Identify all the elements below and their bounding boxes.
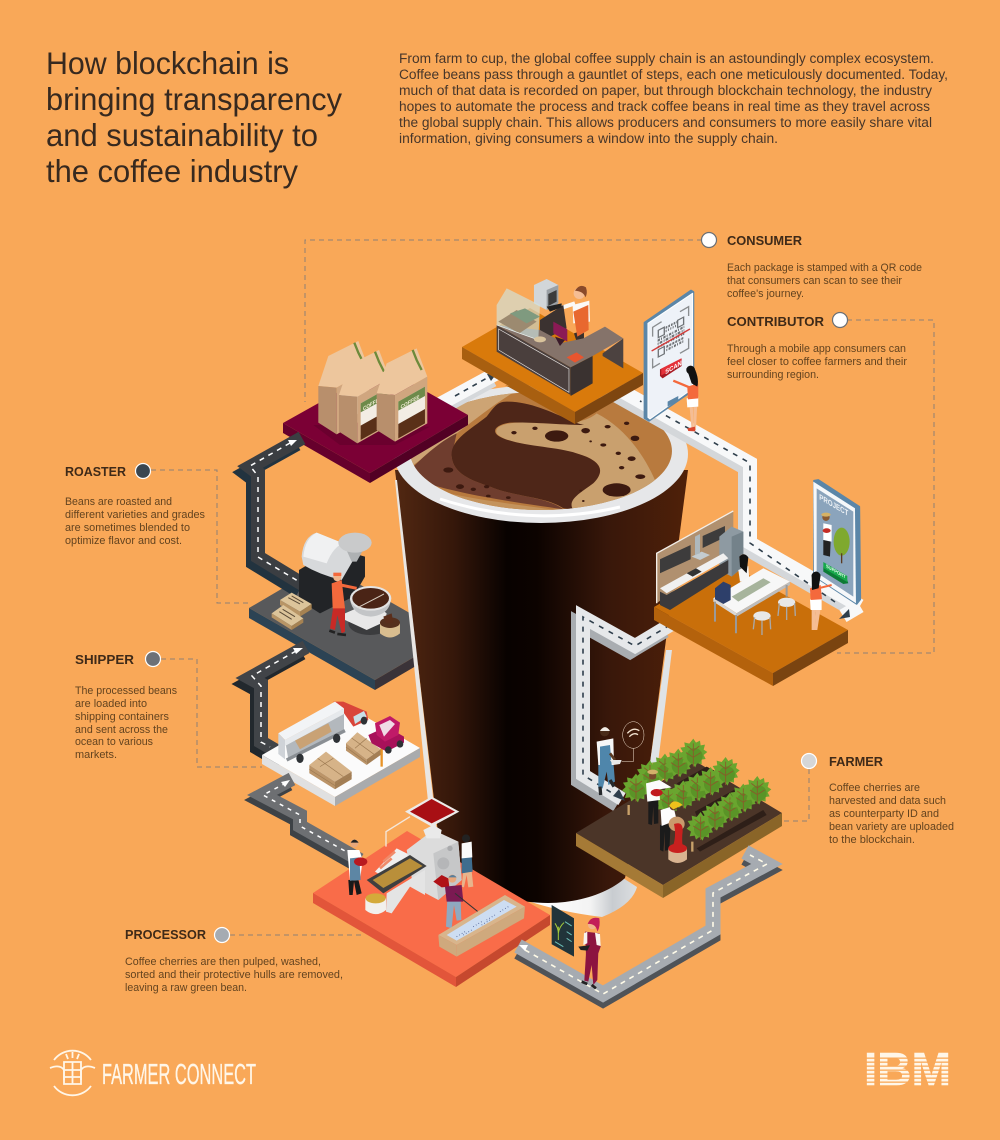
arrow: [487, 373, 497, 381]
bag: COFFEE: [401, 394, 420, 411]
heading: PROCESSOR: [125, 927, 207, 942]
intro paragraph: the global supply chain. This allows producers and consumers to more easily share vital: [399, 115, 932, 130]
platform: processor: [313, 831, 550, 987]
counter top: [497, 325, 623, 367]
logo: Farmer Connect: [50, 1051, 256, 1095]
kitchen with wall, island and contributor: [657, 480, 860, 635]
title: bringing transparency: [46, 81, 342, 117]
wifi badge: [622, 722, 644, 762]
worker at machine: [462, 834, 473, 887]
logo icon: [50, 1051, 95, 1095]
washing tank: [438, 895, 525, 957]
platform: roaster base, partly behind the cup: [249, 564, 450, 690]
red tablet: [567, 352, 584, 363]
forklift: [368, 716, 404, 754]
arrow: [281, 780, 290, 787]
heading: CONSUMER: [727, 233, 803, 248]
description: [727, 343, 907, 381]
scan line: [652, 329, 690, 351]
description: to the blockchain.: [829, 834, 915, 846]
coffee bags: [313, 341, 430, 445]
worker pouring cherries: [660, 801, 685, 852]
intro paragraph: Coffee beans pass through a gauntlet of steps, each one meticulously documented. Today,: [399, 67, 948, 82]
title: the coffee industry: [46, 153, 298, 189]
hopper: [338, 533, 372, 562]
description: feel closer to coffee farmers and their: [727, 356, 907, 368]
callout: farmer: [802, 754, 954, 846]
woman: [578, 918, 601, 988]
scan button: [660, 358, 682, 378]
description: [829, 782, 954, 846]
conveyor: [367, 855, 427, 913]
arrow: [519, 945, 528, 951]
description: optimize flavor and cost.: [65, 535, 182, 547]
counter return: [603, 338, 623, 368]
description: are loaded into: [75, 698, 147, 710]
logo wordmark: FARMER CONNECT: [102, 1059, 256, 1091]
fence posts: [629, 805, 692, 852]
worker with rake: [445, 875, 488, 928]
roaster machine and worker: [272, 533, 400, 637]
rim highlight: [440, 499, 620, 516]
description: harvested and data such: [829, 795, 946, 807]
cup base: [525, 870, 637, 917]
roaster worker: [329, 573, 357, 635]
road: farmer to processor (light gray): [518, 852, 767, 1000]
description: leaving a raw green bean.: [125, 982, 247, 994]
description: [65, 496, 205, 547]
callout: shipper: [75, 652, 177, 761]
wall: [657, 511, 733, 603]
marker: [702, 232, 716, 248]
description: surrounding region.: [727, 369, 819, 381]
farmer with tablet and wifi icon: [597, 722, 644, 795]
basket of cherries: [668, 844, 687, 863]
intro paragraph: [399, 51, 948, 146]
arrow: [613, 789, 625, 801]
bushes: [622, 739, 771, 841]
description: shipping containers: [75, 711, 169, 723]
dashed leader lines: [151, 240, 934, 935]
hood: [692, 552, 710, 560]
description: Each package is stamped with a QR code: [727, 262, 922, 274]
logo: IBM: IBM: [864, 1043, 951, 1095]
marker: [214, 928, 230, 942]
coffee plants: [622, 739, 771, 863]
counter side: [571, 356, 593, 396]
processing machine, workers and washing tank: [347, 797, 525, 957]
description: Through a mobile app consumers can: [727, 343, 906, 355]
coffee cup: [394, 383, 690, 917]
worktop: [660, 553, 728, 593]
counter front: [497, 325, 571, 395]
drum: [302, 533, 354, 580]
description: different varieties and grades: [65, 509, 205, 521]
island: [713, 568, 790, 633]
cash register: [553, 322, 567, 346]
harvester: [646, 770, 672, 825]
callout: processor: [125, 927, 343, 994]
worker with basket: [347, 839, 367, 895]
contributor woman: [810, 572, 832, 630]
espresso machine: [715, 582, 731, 604]
woman at island: [738, 554, 749, 582]
support button: [823, 567, 848, 584]
description: The processed beans: [75, 685, 177, 697]
bag: [318, 341, 369, 434]
bag: COFFEE: [363, 396, 382, 413]
machine body: [407, 825, 462, 900]
red chute: [433, 875, 449, 887]
intro paragraph: much of that data is recorded on paper, but through blockchain technology, the industry: [399, 83, 932, 98]
intro paragraph: hopes to automate the process and track coffee beans in real time as they travel across: [399, 99, 930, 114]
shadows: [348, 612, 392, 635]
description: that consumers can scan to see their: [727, 275, 902, 287]
heading: ROASTER: [65, 464, 127, 479]
bean sacks: [272, 593, 312, 630]
home button: [668, 396, 678, 407]
marker: [136, 464, 150, 478]
data board: [552, 905, 574, 957]
road: processor to shipper (gray): [259, 779, 360, 865]
description: markets.: [75, 749, 117, 761]
intro paragraph: From farm to cup, the global coffee supply chain is an astoundingly complex ecosystem.: [399, 51, 934, 66]
marker: [146, 652, 160, 666]
phone with project screen: SUPPORT: [826, 563, 846, 580]
cooling tray: [350, 586, 391, 617]
description: as counterparty ID and: [829, 808, 939, 820]
heading: CONTRIBUTOR: [727, 314, 825, 329]
coffee surface: [410, 392, 672, 510]
callout: consumer: [702, 232, 922, 300]
cabinet: [299, 553, 365, 613]
phone with project screen: [813, 480, 860, 604]
description: [125, 956, 343, 994]
cafe counter and barista: [497, 279, 623, 396]
platform: bags: [283, 367, 468, 483]
description: [75, 685, 177, 761]
stools: [753, 598, 795, 635]
woman scanning: [673, 366, 698, 431]
stairs and rail: [375, 817, 410, 880]
barista: [560, 286, 590, 342]
road: shipper to roaster (dark): [246, 647, 306, 762]
fridge: [719, 527, 743, 577]
description: sorted and their protective hulls are removed,: [125, 969, 343, 981]
road: kitchen to cafe (white): [615, 390, 860, 619]
title: How blockchain is: [46, 45, 289, 81]
platform: kitchen: [654, 564, 848, 686]
description: ocean to various: [75, 736, 153, 748]
phone body: [645, 291, 693, 421]
trailer: [278, 702, 345, 760]
dark back unit: [540, 305, 567, 337]
cup left edge highlight: [395, 480, 439, 850]
marker: [832, 312, 848, 328]
description: bean variety are uploaded: [829, 821, 954, 833]
title: [46, 45, 342, 189]
woman with data board: [552, 905, 601, 988]
platform: farmer soil: [576, 761, 782, 898]
arrow: [293, 648, 303, 654]
heading: SHIPPER: [75, 652, 135, 667]
QR code: [658, 317, 684, 357]
coffee machine: [534, 279, 562, 312]
arrow: [288, 440, 297, 446]
barrel of beans: [380, 613, 400, 637]
phone screen: [648, 293, 693, 419]
description: [727, 262, 922, 300]
title: and sustainability to: [46, 117, 318, 153]
cooling base: [345, 602, 387, 630]
road: farmer to contributor on cup: [578, 617, 670, 805]
description: Coffee cherries are then pulped, washed,: [125, 956, 321, 968]
description: are sometimes blended to: [65, 522, 190, 534]
callout: contributor: [727, 312, 907, 381]
shipping truck, pallets and forklift: [278, 702, 404, 789]
barrel of beans: [365, 893, 386, 914]
truck cab: [333, 702, 368, 727]
cup rim: [394, 385, 688, 523]
phone with QR code and scanner: [645, 291, 698, 431]
QR frame: [653, 307, 689, 368]
description: Beans are roasted and: [65, 496, 172, 508]
phone with project screen: PROJECT: [819, 492, 848, 518]
platform: cafe: [462, 308, 643, 424]
pallet stack on forklift: [346, 732, 382, 767]
heading: FARMER: [829, 754, 884, 769]
coffee cup on counter: [534, 336, 546, 342]
pallet stack: [309, 752, 352, 789]
intro paragraph: information, giving consumers a window into the supply chain.: [399, 131, 778, 146]
description: and sent across the: [75, 724, 168, 736]
scan button: SCAN: [665, 360, 682, 376]
plant rows shadow: [677, 767, 767, 852]
callout: roaster: [65, 464, 205, 547]
platform: shipper: [262, 706, 420, 806]
description: coffee's journey.: [727, 288, 804, 300]
upper cabinets: [660, 545, 691, 573]
tree on screen: [834, 528, 850, 556]
cup body: [395, 470, 688, 903]
road: cafe to bags (white): [440, 373, 497, 409]
stove: [687, 568, 702, 577]
road: roaster to bags (dark): [245, 438, 304, 591]
farmer on screen: [821, 513, 832, 557]
marker: [802, 754, 816, 768]
glass display: [497, 288, 540, 340]
arrow: [839, 609, 850, 619]
description: Coffee cherries are: [829, 782, 920, 794]
cup right edge highlight: [650, 650, 672, 763]
wheels: [296, 717, 367, 763]
lower cabinets: [660, 560, 728, 610]
farmer: [597, 727, 622, 795]
hopper of cherries: [405, 797, 459, 827]
